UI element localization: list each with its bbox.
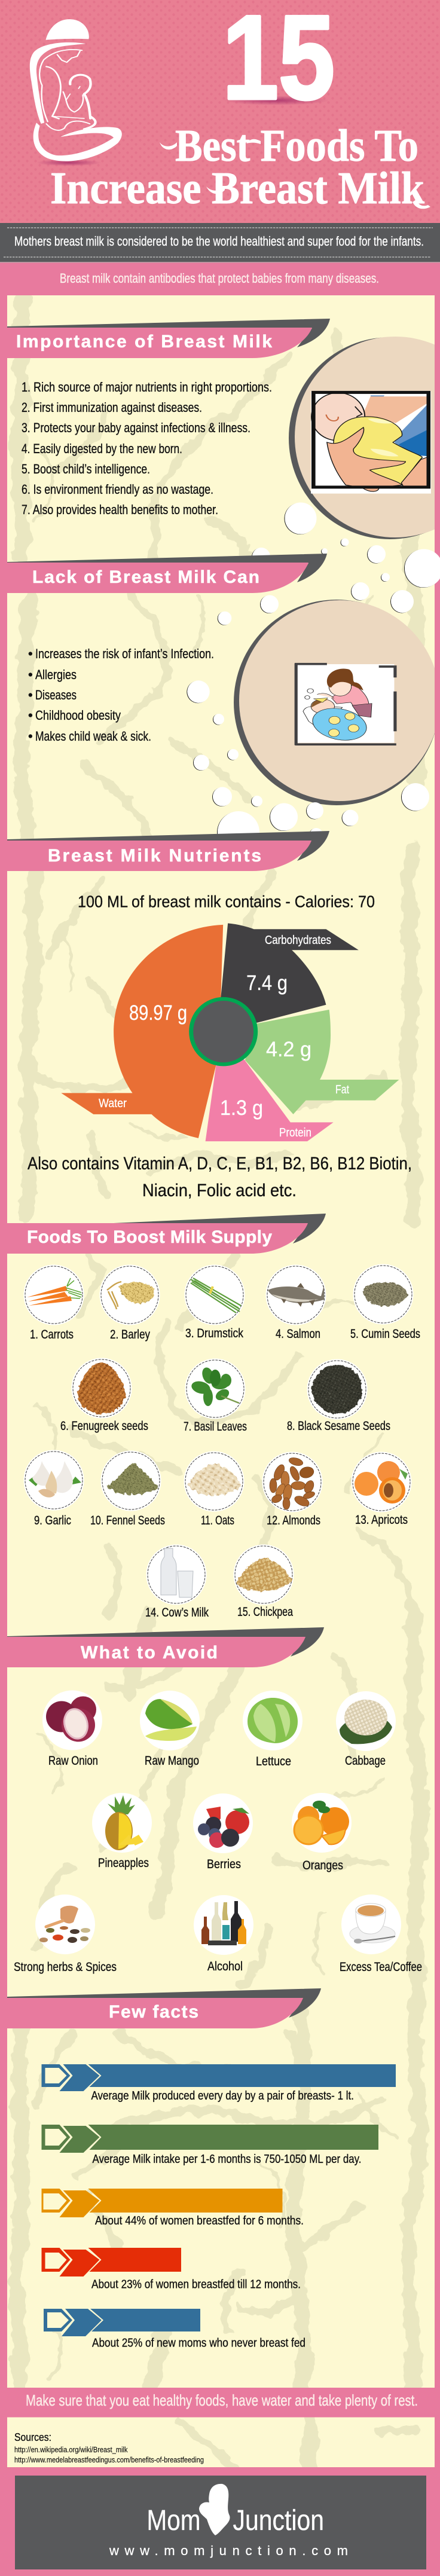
- text block: lack list: Diseases: [35, 687, 77, 702]
- food: apricots: [352, 1452, 411, 1512]
- food labels: 9. Garlic: [34, 1514, 71, 1527]
- heading: What to Avoid: [0, 1627, 324, 1667]
- bar: 44 percent: About 44% of women breastfed for 6 months.: [95, 2214, 304, 2227]
- footer: MomJunction logo: www.momjunction.com: [109, 2543, 348, 2558]
- sources: [14, 2431, 204, 2464]
- avoid: raw onion: [42, 1691, 102, 1750]
- food labels: 14. Cow’s Milk: [145, 1606, 209, 1619]
- avoid: berries: [193, 1793, 253, 1853]
- food labels: 10. Fennel Seeds: [90, 1514, 165, 1527]
- text block: lack list: •: [28, 729, 33, 744]
- heading: Foods To Boost Milk Supply: Foods To Boost Milk Supply: [27, 1227, 272, 1247]
- heading: Few facts: [0, 1988, 321, 2028]
- food labels: 15. Chickpea: [237, 1605, 293, 1619]
- text block: lack list: [28, 646, 214, 744]
- slice labels: Carbohydrates: [265, 934, 331, 947]
- slice values: [129, 971, 311, 1120]
- avoid: raw mango: [140, 1691, 200, 1750]
- text block: importance list: [22, 380, 272, 517]
- heading: Importance of Breast Milk: Importance of Breast Milk: [16, 332, 272, 352]
- text block: lack list: Allergies: [35, 667, 77, 682]
- slice: protein: [206, 1059, 334, 1141]
- slice labels: [99, 934, 349, 1139]
- heading: Few facts: Few facts: [109, 2002, 198, 2022]
- text block: importance list: 6. Is environment friendly as no wastage.: [22, 482, 213, 497]
- text block: lack list: •: [28, 667, 33, 682]
- avoid labels: Pineapples: [98, 1856, 149, 1870]
- slice labels: Fat: [335, 1083, 349, 1096]
- slice values: 7.4 g: [246, 971, 288, 995]
- food labels: 4. Salmon: [276, 1327, 320, 1341]
- food: oats: [184, 1452, 244, 1511]
- food labels: 3. Drumstick: [185, 1327, 243, 1340]
- food labels: [30, 1327, 420, 1619]
- heading: Lack of Breast Milk Can: Lack of Breast Milk Can: [32, 567, 259, 587]
- title: Best Foods To Increase Breast Milk: Best Foods To: [175, 121, 418, 171]
- food: fenugreek: [72, 1358, 132, 1418]
- text block: lack list: Increases the risk of infant’s Infection.: [35, 646, 214, 661]
- heading: Breast Milk Nutrients: [0, 831, 329, 871]
- food labels: 1. Carrots: [30, 1328, 74, 1342]
- footer: MomJunction logo: Mom: [147, 2505, 201, 2537]
- slice labels: Protein: [279, 1126, 311, 1139]
- avoid: cabbage: [336, 1691, 396, 1751]
- avoid labels: Raw Onion: [48, 1754, 98, 1768]
- avoid labels: Berries: [207, 1857, 241, 1871]
- slice: fat: [245, 1010, 399, 1114]
- food: cumin seeds: [353, 1264, 414, 1325]
- heading: Foods To Boost Milk Supply: [0, 1214, 326, 1254]
- avoid: strong herbs and spices: [35, 1894, 95, 1954]
- text: calories: 100 ML of breast milk contains - Calories: 70: [78, 892, 375, 911]
- text: vitamins: Niacin, Folic acid etc.: [142, 1181, 297, 1200]
- sources: http://www.medelabreastfeedingus.com/benefits-of-breastfeeding: [14, 2455, 204, 2464]
- food labels: 12. Almonds: [267, 1514, 320, 1527]
- food: garlic: [24, 1450, 84, 1510]
- bar: 44 percent: [42, 2189, 304, 2227]
- bar: daily milk produced: Average Milk produced every day by a pair of breasts- 1 lt.: [91, 2089, 354, 2103]
- slice values: 1.3 g: [220, 1096, 263, 1120]
- hub: [191, 999, 256, 1064]
- text block: lack list: •: [28, 646, 33, 661]
- slice: water: [61, 925, 223, 1138]
- food: cow's milk: [146, 1545, 207, 1605]
- bar: 25 percent: [44, 2309, 305, 2349]
- text block: importance list: 4. Easily digested by the new born.: [22, 441, 182, 456]
- avoid: excess tea/coffee: [341, 1894, 401, 1954]
- avoid labels: Raw Mango: [145, 1754, 199, 1768]
- food: salmon: [265, 1265, 326, 1325]
- panel: lack picture circle: [234, 600, 440, 805]
- text block: lack list: •: [28, 708, 33, 723]
- food labels: 2. Barley: [110, 1328, 150, 1342]
- text block: importance list: 1. Rich source of major nutrients in right proportions.: [22, 380, 272, 395]
- pink strip behind closing message: [0, 2388, 440, 2418]
- food: black sesame: [307, 1359, 367, 1419]
- bar: 23 percent: About 23% of women breastfed till 12 months.: [91, 2278, 301, 2291]
- text block: importance list: 7. Also provides health benefits to mother.: [22, 502, 218, 517]
- sources: Sources:: [14, 2431, 51, 2443]
- avoid labels: Alcohol: [207, 1960, 243, 1973]
- bar: daily milk produced: [42, 2064, 396, 2103]
- slice: carbohydrates: [221, 923, 359, 1023]
- avoid: pineapples: [92, 1793, 152, 1853]
- food: fennel seeds: [100, 1450, 161, 1511]
- logo silhouette: [199, 2484, 230, 2535]
- text: vitamins: [28, 1154, 412, 1200]
- text block: lack list: Childhood obesity: [35, 708, 121, 723]
- food: basil: [185, 1358, 245, 1419]
- food labels: 5. Cumin Seeds: [350, 1327, 420, 1341]
- panel: importance picture circle: [289, 337, 440, 539]
- avoid labels: Strong herbs & Spices: [14, 1960, 117, 1974]
- illustration: mother with sick child: [295, 664, 396, 746]
- footer: MomJunction logo: [15, 2476, 426, 2569]
- footer: MomJunction logo: Junction: [233, 2505, 324, 2537]
- food: barley: [99, 1265, 160, 1325]
- slice values: 89.97 g: [129, 1001, 187, 1025]
- heading: Lack of Breast Milk Can: [0, 554, 327, 593]
- slice values: 4.2 g: [266, 1038, 311, 1061]
- food labels: 11. Oats: [201, 1514, 234, 1527]
- header background: [0, 0, 440, 223]
- food labels: 13. Apricots: [355, 1513, 408, 1527]
- food labels: 8. Black Sesame Seeds: [287, 1419, 390, 1433]
- food: chickpea: [233, 1545, 294, 1605]
- avoid labels: Lettuce: [256, 1755, 291, 1768]
- heading: What to Avoid: What to Avoid: [81, 1643, 218, 1663]
- icon: mother nursing baby: [30, 19, 122, 166]
- avoid labels: Cabbage: [345, 1754, 386, 1768]
- text block: importance list: 2. First immunization against diseases.: [22, 400, 202, 415]
- pie chart: nutrients: [61, 923, 399, 1141]
- bar: monthly milk intake: Average Milk intake per 1-6 months is 750-1050 ML per day.: [92, 2153, 361, 2166]
- avoid: alcohol: [194, 1895, 253, 1955]
- food: drumstick: [184, 1265, 245, 1325]
- avoid labels: Oranges: [302, 1859, 343, 1872]
- heading: Breast Milk Nutrients: Breast Milk Nutrients: [48, 846, 261, 866]
- bar: monthly milk intake: [42, 2125, 378, 2166]
- title: Best Foods To Increase Breast Milk: [50, 121, 430, 213]
- text block: lack list: •: [28, 687, 33, 702]
- food: almonds: [262, 1452, 323, 1512]
- illustration: baby breastfeeding: [311, 391, 431, 494]
- text block: importance list: 3. Protects your baby against infections & illness.: [22, 420, 250, 435]
- food labels: 7. Basil Leaves: [184, 1420, 247, 1434]
- text block: importance list: 5. Boost child’s intelligence.: [22, 462, 150, 476]
- food: carrots: [24, 1265, 84, 1325]
- bubbles: upper group: [218, 502, 440, 625]
- bubbles: lower group: [187, 680, 429, 834]
- sources: http://en.wikipedia.org/wiki/Breast_milk: [14, 2445, 128, 2454]
- avoid: lettuce: [243, 1691, 302, 1750]
- avoid labels: [14, 1754, 422, 1974]
- bar: 25 percent: About 25% of new moms who never breast fed: [92, 2336, 305, 2349]
- heading: Importance of Breast Milk: [0, 319, 330, 358]
- food labels: 6. Fenugreek seeds: [60, 1419, 148, 1433]
- slice labels: Water: [99, 1097, 127, 1110]
- avoid: oranges: [292, 1793, 352, 1853]
- bar: 23 percent: [42, 2248, 301, 2291]
- intro band: [0, 223, 440, 263]
- text block: lack list: Makes child weak & sick.: [35, 729, 151, 744]
